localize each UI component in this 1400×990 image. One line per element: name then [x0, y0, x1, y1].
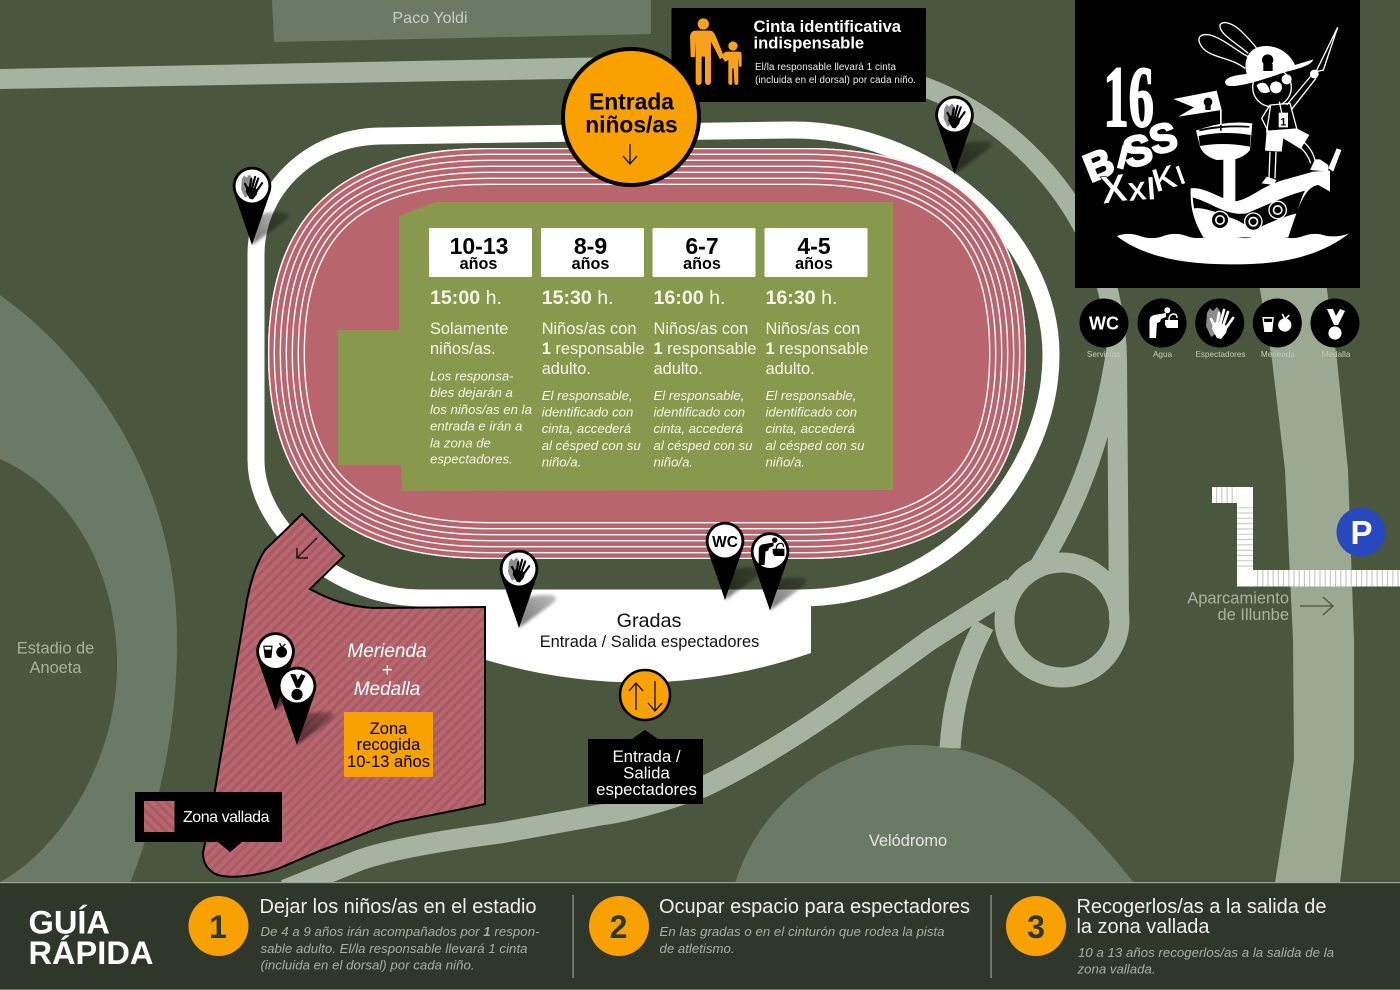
column: 8-9 años: adulto.: [542, 360, 591, 378]
legend icon: espectadores: [1195, 298, 1246, 359]
column: 6-7 años: al césped con su: [654, 438, 753, 453]
column: 10-13 años: 10-13: [450, 233, 508, 259]
text: Merienda + Medalla: [347, 641, 427, 700]
pin: merienda: [256, 632, 312, 710]
column: 6-7 años: identificado con: [654, 404, 745, 420]
step 3: Recogerlos/as a la salida de: [1076, 896, 1326, 918]
logo word Txiki: I: [1171, 159, 1189, 191]
logo: 16 Biss Txiki pirate: 1: [1280, 116, 1286, 128]
column: 10-13 años: los niños/as en la: [430, 402, 532, 417]
step 2: [589, 896, 970, 956]
column: 6-7 años: años: [683, 255, 721, 273]
column: 8-9 años: El responsable,: [542, 388, 633, 403]
step 1: [188, 896, 540, 972]
legend icon: agua: Agua: [1153, 350, 1173, 359]
column: 10-13 años: espectadores.: [430, 452, 513, 466]
step 1: 1: [209, 909, 227, 945]
step 1: sable adulto. El/la responsable llevará 1 cinta: [260, 941, 528, 956]
legend icon: medalla: [1310, 298, 1360, 359]
step 1: Dejar los niños/as en el estadio: [260, 896, 536, 918]
callout: cinta identificativa: (incluida en el dorsal) por cada niño.: [755, 75, 916, 86]
column: 10-13 años: la zona de: [430, 436, 491, 450]
column: 8-9 años: 8-9: [574, 233, 607, 259]
legend icon: agua: [1138, 298, 1186, 359]
column: 6-7 años: 1 responsable: [654, 340, 756, 358]
road: right avenue: [1245, 230, 1354, 883]
pin: espectadores top right: [935, 96, 991, 174]
column: 8-9 años: 1 responsable: [542, 340, 645, 358]
icon: parking P: [1336, 508, 1386, 556]
column: 10-13 años: 15:00 h.: [430, 287, 502, 309]
step 2: En las gradas o en el cinturón que rodea la pista: [660, 924, 944, 939]
building: Estadio de Anoeta: [0, 295, 177, 883]
callout: Entrada / Salida espectadores: Salida: [623, 764, 670, 782]
column: 10-13 años: [429, 228, 532, 466]
legend icon: medalla: Medalla: [1322, 350, 1351, 359]
fenced zone: [203, 514, 485, 877]
column: 4-5 años: adulto.: [766, 360, 815, 378]
text: Merienda + Medalla: +: [381, 660, 393, 681]
callout: Entrada / Salida espectadores: Entrada /: [612, 747, 681, 766]
callout: zona recogida: [344, 712, 433, 777]
crosswalk to parking: [1212, 487, 1400, 586]
pin: espectadores left: [233, 167, 289, 245]
column: 8-9 años: niño/a.: [542, 454, 581, 470]
building: Paco Yoldi: Paco Yoldi: [392, 9, 468, 27]
column: 6-7 años: El responsable,: [654, 388, 744, 403]
column: 4-5 años: Niños/as con: [766, 320, 860, 338]
step 3: zona vallada.: [1076, 962, 1156, 976]
logo pirate: [1199, 23, 1338, 178]
icon: parking P: P: [1350, 514, 1373, 551]
entrance badge: Entrada niños/as: [563, 49, 699, 185]
step 1: De 4 a 9 años irán acompañados por 1 respon-: [260, 924, 540, 939]
column: 10-13 años: entrada e irán a: [430, 418, 522, 434]
pin: medalla: [278, 667, 334, 745]
step 3: [1006, 896, 1334, 976]
building: Estadio de Anoeta: Estadio de: [17, 640, 94, 658]
column: 4-5 años: 16:30 h.: [766, 287, 837, 309]
label: Aparcamiento de Illunbe: [1187, 590, 1333, 624]
callout: zona recogida: Zona: [370, 719, 408, 738]
column: 6-7 años: [652, 228, 756, 470]
logo word BISS: B: [1078, 140, 1120, 191]
logo word Txiki: [1098, 158, 1189, 213]
pin: servicios WC: [706, 522, 762, 600]
stands: Gradas: Gradas: [617, 610, 682, 632]
legend: zona vallada: [135, 792, 282, 852]
stands: Gradas: [486, 590, 811, 682]
column: 8-9 años: [541, 228, 645, 470]
callout: zona recogida: 10-13 años: [347, 752, 430, 771]
column: 10-13 años: Solamente: [430, 320, 508, 338]
column: 6-7 años: adulto.: [654, 360, 703, 378]
pin: servicios WC: WC: [712, 534, 738, 551]
legend icon: servicios: [1080, 298, 1128, 359]
step 2: de atletismo.: [660, 941, 734, 956]
legend icon: servicios: WC: [1089, 314, 1119, 334]
field with age schedule: [338, 202, 893, 491]
logo ship: [1173, 91, 1341, 237]
arrow: into zone: [297, 538, 317, 558]
column: 6-7 años: 6-7: [685, 233, 719, 259]
logo word Txiki: x: [1126, 169, 1149, 209]
column: 6-7 años: niño/a.: [654, 454, 693, 470]
arrow: down: [623, 144, 637, 164]
heading: Guía rápida: [28, 904, 153, 971]
pin: espectadores gradas: [500, 550, 556, 628]
callout: Entrada / Salida espectadores: [588, 730, 703, 804]
column: 4-5 años: 1 responsable: [766, 340, 868, 358]
column: 10-13 años: Los responsa-: [430, 368, 514, 384]
column: 8-9 años: al césped con su: [542, 438, 641, 453]
step 2: 2: [610, 909, 627, 945]
column: 4-5 años: [764, 228, 868, 470]
column: 10-13 años: años: [460, 255, 497, 273]
column: 8-9 años: años: [572, 255, 609, 273]
column: 8-9 años: Niños/as con: [542, 320, 636, 338]
column: 4-5 años: cinta, accederá: [766, 421, 855, 436]
pin: agua: [751, 532, 807, 610]
column: 10-13 años: bles dejarán a: [430, 385, 513, 400]
logo word BISS: S: [1118, 125, 1157, 178]
label: Aparcamiento de Illunbe: Aparcamiento: [1187, 590, 1289, 608]
column: 6-7 años: 16:00 h.: [654, 287, 725, 309]
callout: cinta identificativa: indispensable: [754, 34, 864, 52]
heading: Guía rápida: RÁPIDA: [28, 934, 153, 971]
callout: cinta identificativa: El/la responsable llevará 1 cinta: [755, 62, 897, 73]
column: 4-5 años: identificado con: [766, 404, 857, 420]
icon: adult and child: [690, 18, 742, 85]
badge: entrada/salida arrows: [620, 670, 670, 720]
legend icon: servicios: Servicios: [1087, 350, 1120, 359]
logo word BISS: S: [1144, 113, 1182, 164]
callout: Entrada / Salida espectadores: espectadores: [596, 780, 697, 799]
column: 6-7 años: Niños/as con: [654, 320, 748, 338]
running track outer white belt: [256, 130, 1051, 598]
callout: zona recogida: recogida: [357, 735, 421, 754]
roads: [0, 57, 1120, 890]
column: 8-9 años: 15:30 h.: [542, 287, 614, 309]
step 3: la zona vallada: [1076, 916, 1210, 938]
logo number 16: 16: [1103, 49, 1154, 146]
stands: Gradas: Entrada / Salida espectadores: [540, 633, 759, 651]
building: Velódromo: Velódromo: [869, 832, 947, 850]
column: 10-13 años: niños/as.: [430, 340, 496, 358]
column: 4-5 años: niño/a.: [766, 454, 805, 470]
column: 4-5 años: años: [795, 255, 833, 273]
legend icon: merienda: Merienda: [1261, 350, 1296, 359]
heading: Guía rápida: GUÍA: [28, 904, 110, 940]
logo word BISS: I: [1114, 139, 1132, 176]
step 3: 10 a 13 años recogerlos/as a la salida de la: [1078, 945, 1334, 960]
column: 8-9 años: cinta, accederá: [542, 421, 631, 436]
callout: cinta identificativa: Cinta identificativa: [754, 17, 902, 36]
building: Paco Yoldi: [272, 0, 651, 42]
step 2: Ocupar espacio para espectadores: [659, 896, 970, 918]
label: Aparcamiento de Illunbe: de Illunbe: [1217, 606, 1289, 624]
column: 6-7 años: cinta, accederá: [654, 421, 743, 436]
entrance badge: Entrada niños/as: Entrada: [589, 88, 674, 114]
logo word Txiki: X: [1098, 166, 1130, 213]
logo sea: [1117, 233, 1349, 264]
logo word Txiki: K: [1148, 158, 1181, 200]
column: 8-9 años: identificado con: [542, 404, 633, 420]
logo word Txiki: I: [1145, 170, 1157, 208]
running track with lane lines: [268, 148, 1026, 559]
step 3: 3: [1027, 909, 1045, 945]
column: 4-5 años: al césped con su: [766, 438, 865, 453]
legend: zona vallada: Zona vallada: [183, 809, 270, 826]
text: Merienda + Medalla: Merienda: [347, 641, 427, 662]
logo word BISS: [1078, 113, 1182, 191]
step 1: (incluida en el dorsal) por cada niño.: [260, 958, 474, 972]
arrow: to parking: [1300, 597, 1333, 615]
building: Estadio de Anoeta: Anoeta: [30, 659, 82, 677]
entrance badge: Entrada niños/as: niños/as: [585, 112, 678, 138]
icon legend row: [1080, 298, 1360, 359]
logo: 16 Biss Txiki pirate: [1075, 0, 1360, 288]
column: 4-5 años: 4-5: [797, 233, 831, 259]
legend icon: espectadores: Espectadores: [1195, 350, 1246, 359]
legend icon: merienda: [1253, 298, 1302, 359]
column: 4-5 años: El responsable,: [766, 388, 856, 403]
footer: quick guide: [0, 882, 1400, 990]
building: Velódromo: [735, 745, 1134, 883]
text: Merienda + Medalla: Medalla: [354, 679, 420, 700]
callout: cinta identificativa: [672, 8, 926, 102]
